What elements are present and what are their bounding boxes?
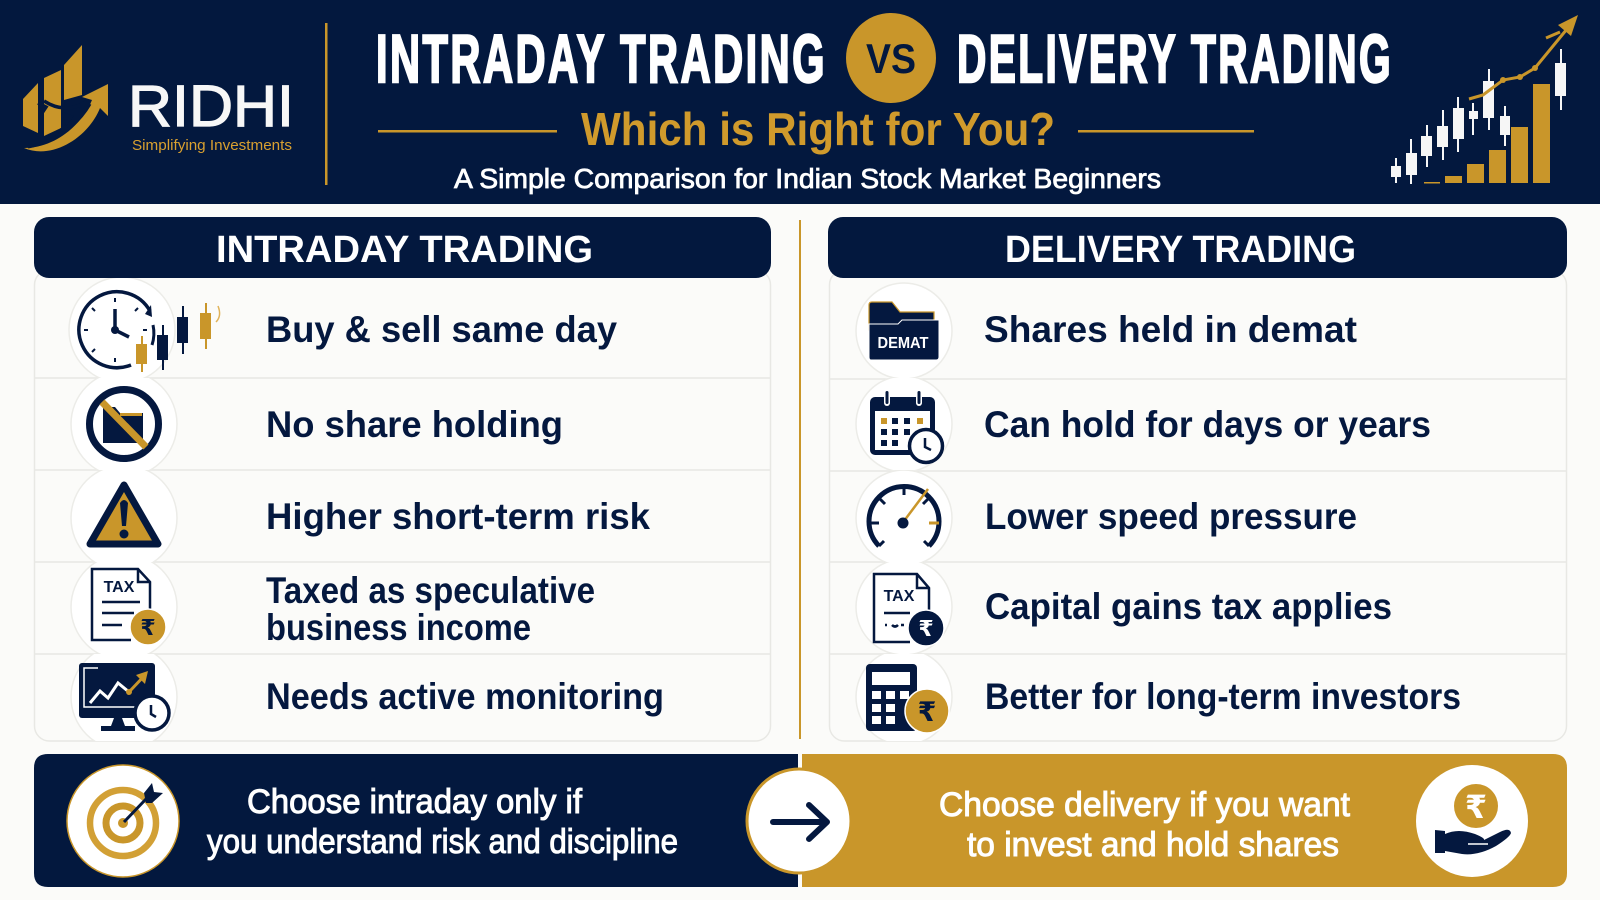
arrow badge [747, 754, 851, 887]
advice text: you understand risk and discipline [207, 823, 678, 861]
logo tagline: Simplifying Investments [132, 137, 292, 154]
icon: speedometer [856, 470, 952, 566]
icon: tax document: ₹ [140, 616, 156, 641]
icon: no folder [70, 378, 178, 470]
candlestick growth chart [1391, 15, 1578, 184]
icon: target [67, 765, 179, 877]
logo wordmark: RIDHI [128, 74, 294, 139]
banner: intraday advice [34, 754, 798, 887]
row: shares in demat: Shares held in demat [984, 309, 1357, 350]
icon: demat folder: DEMAT [878, 335, 929, 352]
advice text [207, 783, 678, 861]
tagline: A Simple Comparison for Indian Stock Market Beginners [454, 163, 1161, 194]
panel heading: INTRADAY TRADING [216, 229, 593, 271]
row: capital gains: Capital gains tax applies [985, 586, 1392, 627]
icon: tax document [70, 562, 178, 654]
row: taxed as speculative: business income [266, 607, 531, 648]
icon: monitor with chart [70, 654, 178, 741]
row: buy and sell: Buy & sell same day [266, 309, 617, 350]
panel card [830, 270, 1566, 741]
row: long-term investors: Better for long-term investors [985, 676, 1461, 717]
subtitle question: Which is Right for You? [581, 103, 1055, 155]
row: taxed as speculative: Taxed as speculative [266, 570, 595, 611]
row: higher risk: Higher short-term risk [266, 496, 650, 537]
gold centre divider [799, 220, 801, 739]
panel heading [34, 217, 771, 278]
panel heading: DELIVERY TRADING [1005, 229, 1356, 271]
advice text: Choose intraday only if [247, 783, 583, 821]
icon: hand with coin: ₹ [1465, 788, 1487, 826]
icon: calculator: ₹ [918, 697, 936, 728]
header band [0, 0, 1600, 204]
icon: tax document: TAX [104, 579, 135, 596]
panel card [34, 270, 770, 741]
panel: delivery trading [828, 217, 1567, 745]
icon: calendar [856, 376, 952, 472]
row: can hold: Can hold for days or years [984, 404, 1431, 445]
row: no share holding: No share holding [266, 404, 563, 445]
icon: clock and candles [69, 277, 220, 383]
icon: warning [70, 470, 178, 562]
row: lower speed: Lower speed pressure [985, 496, 1357, 537]
panel: intraday trading [34, 217, 771, 750]
vs badge [846, 13, 936, 103]
advice text: to invest and hold shares [967, 826, 1339, 864]
row: taxed as speculative [266, 570, 595, 648]
banner: delivery advice [802, 754, 1567, 887]
advice text [939, 786, 1351, 864]
icon: capital gains tax: TAX [884, 588, 915, 605]
advice text: Choose delivery if you want [939, 786, 1351, 824]
row: active monitoring: Needs active monitoring [266, 676, 664, 717]
icon: calculator [856, 649, 952, 745]
panel heading [828, 217, 1567, 278]
logo mark [23, 45, 108, 151]
icon: hand with coin [1416, 765, 1528, 877]
title left: INTRADAY TRADING [376, 21, 827, 97]
header divider [325, 23, 328, 185]
icon: demat folder [856, 283, 952, 379]
vs badge: VS [866, 35, 916, 82]
icon: capital gains tax: ₹ [918, 617, 934, 642]
icon: capital gains tax [856, 559, 952, 655]
